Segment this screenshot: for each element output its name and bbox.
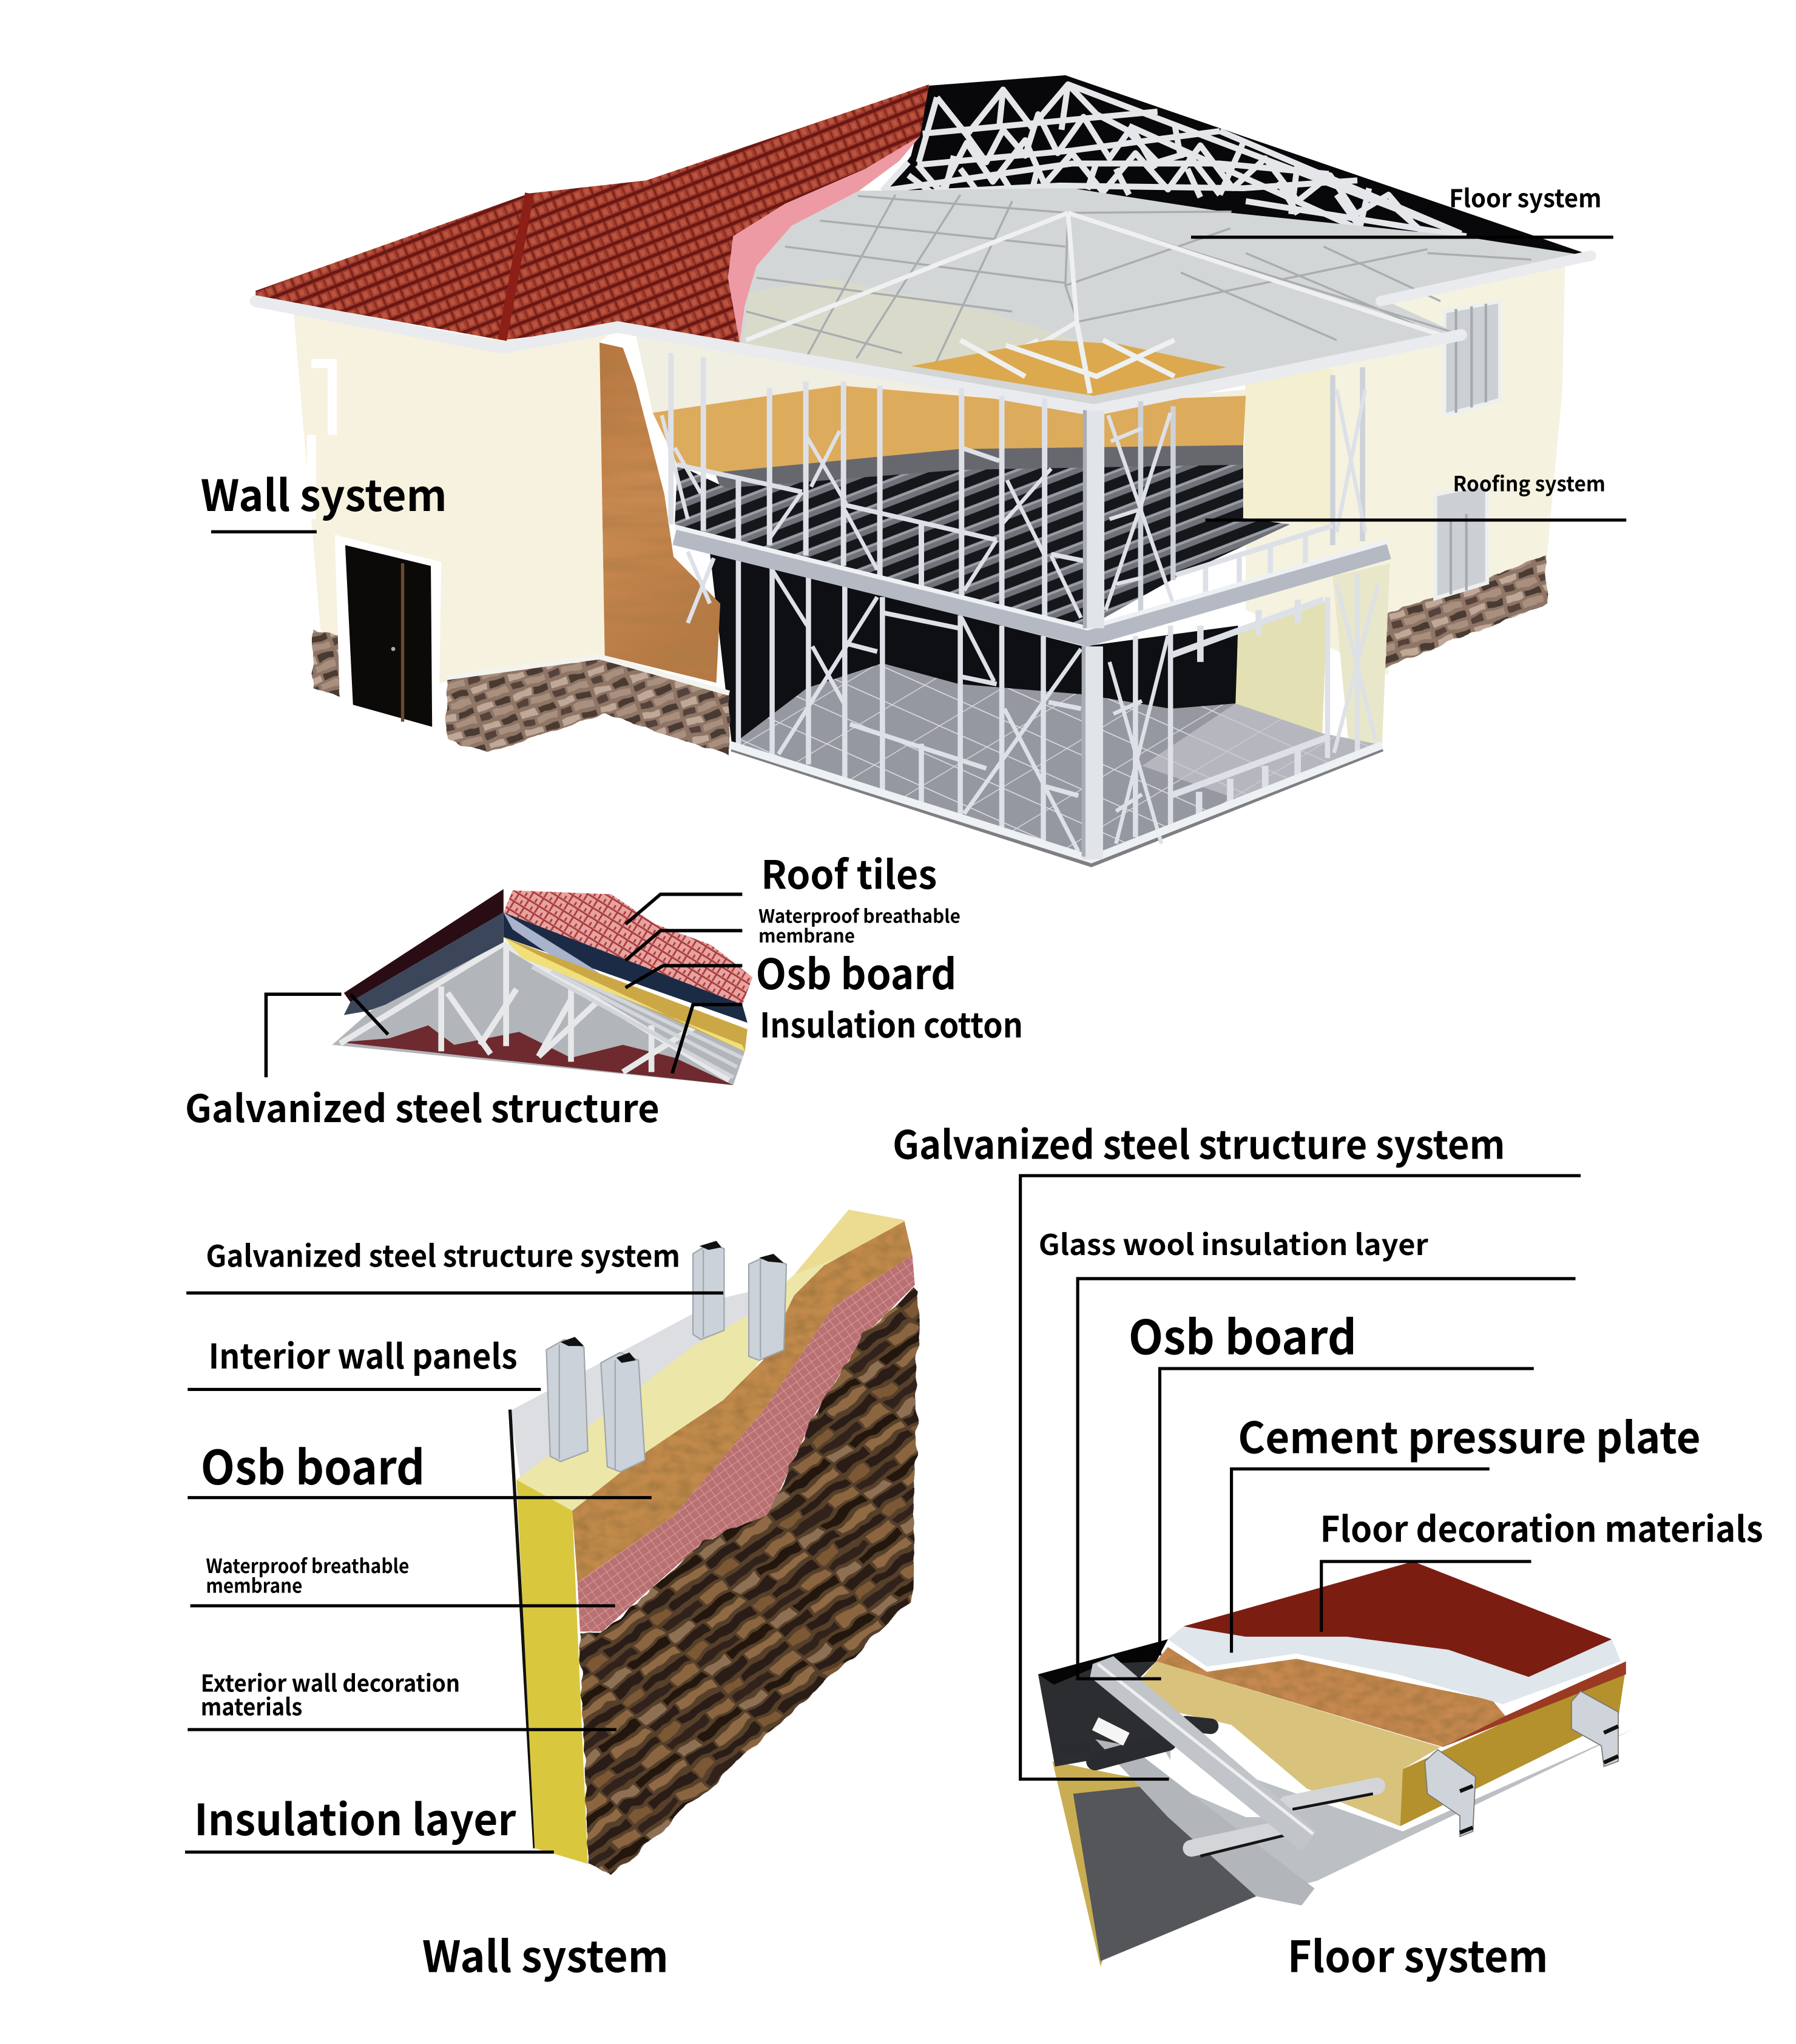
upper right studs: [1141, 367, 1363, 618]
label: osb board: Osb board: [201, 1430, 425, 1498]
upper right braces: [1106, 390, 1365, 610]
upper left studs: [671, 353, 1045, 618]
label: house wall system: Wall system: [201, 462, 447, 524]
leader lines: floor section: [1021, 1176, 1581, 1779]
label: osb board: Osb board: [756, 941, 956, 1001]
label: waterproof breathable membrane: membrane: [206, 1571, 302, 1599]
membrane layer: [578, 1255, 915, 1631]
insulation front: [1400, 1667, 1626, 1826]
exterior stone: [580, 1285, 919, 1875]
left stone base: [447, 659, 729, 756]
label: roof tiles: Roof tiles: [761, 844, 937, 901]
label: waterproof breathable membrane: membrane: [758, 921, 855, 948]
leader lines: wall section: [185, 1293, 723, 1852]
right cream wall: [1246, 266, 1565, 675]
illustration: wall section: [510, 1210, 919, 1875]
dark gray panel: [1073, 1784, 1256, 1961]
cement plate: [1168, 1626, 1621, 1704]
lower storey floor tiles: [732, 663, 1382, 861]
dark roof side: [344, 889, 504, 1002]
eaves: [255, 256, 1591, 410]
label: cement pressure plate: Cement pressure plate: [1238, 1404, 1701, 1466]
dark end: [1038, 1639, 1175, 1767]
illustration: roof section: [333, 889, 752, 1085]
lower right rail: [1170, 600, 1328, 817]
label: floor decoration materials: Floor decoration materials: [1320, 1501, 1763, 1552]
label: galvanized steel structure: Galvanized steel structure: [185, 1078, 660, 1133]
floor finish edge: [1443, 1662, 1626, 1747]
steel studs: [546, 1241, 786, 1472]
clips: [1425, 1691, 1618, 1836]
lower storey dark room: [710, 552, 1238, 779]
right stone base: [1386, 555, 1547, 667]
navy underlay: [344, 912, 504, 1015]
lower left studs: [738, 555, 1044, 845]
lower right studs: [1135, 574, 1357, 837]
label: glass wool insulation layer: Glass wool insulation layer: [1039, 1222, 1428, 1264]
label: galvanized steel structure system: Galvanized steel structure system: [206, 1233, 680, 1276]
label: waterproof breathable membrane: [206, 1551, 409, 1599]
insulation left strip: [1053, 1761, 1170, 1966]
steel rails and bars: [1060, 1656, 1377, 1906]
floor finish: [1184, 1562, 1612, 1677]
label: waterproof breathable membrane: Waterproof breathable: [206, 1551, 409, 1579]
label: waterproof breathable membrane: [758, 902, 960, 948]
illustration: floor section: [1038, 1562, 1634, 1966]
roof tiles: [504, 890, 752, 1004]
insulation: [504, 937, 748, 1051]
lower left rails: [848, 612, 1081, 796]
upper left braces: [662, 415, 1081, 618]
side wall inner panel: [1243, 350, 1332, 526]
label: galvanized steel structure system: Galvanized steel structure system: [893, 1113, 1505, 1170]
opening under roof: [911, 340, 1226, 396]
upper right rail: [1176, 526, 1332, 597]
caption: wall system: Wall system: [422, 1923, 669, 1985]
interior steel truss: [333, 944, 745, 1085]
lower storey side wall: [1235, 601, 1328, 733]
label: insulation cotton: Insulation cotton: [760, 999, 1023, 1048]
osb layer: [572, 1222, 913, 1582]
leader lines: roof section: [266, 895, 742, 1077]
label: exterior wall decoration materials: Exterior wall decoration: [201, 1665, 460, 1699]
wood sheathing: [599, 343, 720, 683]
right windows: [1435, 301, 1500, 598]
roof pink membrane: [728, 137, 920, 343]
label: exterior wall decoration materials: [201, 1665, 460, 1722]
label: exterior wall decoration materials: materials: [201, 1688, 302, 1722]
red tile roof: [255, 84, 929, 343]
illustration: house cutaway: [255, 75, 1592, 863]
osb layer: [1156, 1647, 1505, 1747]
upper storey interior wall: [653, 385, 1246, 472]
left cream wall: [293, 309, 614, 701]
label: osb board: Osb board: [1129, 1300, 1357, 1368]
upper storey joists: [675, 465, 1290, 629]
insulation top: [1141, 1662, 1440, 1826]
upper storey gray band: [715, 445, 1243, 506]
mid floor beam: [675, 536, 1388, 637]
interior wall panel: [510, 1285, 778, 1486]
label: house roofing system: Roofing system: [1453, 467, 1605, 498]
label: house floor system: Floor system: [1449, 178, 1602, 214]
steel frame: [662, 353, 1388, 859]
membrane: [504, 912, 748, 1023]
lower left braces: [688, 552, 1081, 851]
label: interior wall panels: Interior wall panels: [209, 1330, 518, 1379]
upper storey back area: [636, 335, 1246, 413]
label: waterproof breathable membrane: Waterproof breathable: [758, 902, 960, 929]
lower right braces: [1110, 584, 1378, 844]
upper left rails: [677, 448, 1084, 561]
steel roof truss: [859, 75, 1592, 256]
translucent roof panels: [728, 188, 1587, 405]
insulation top: [516, 1210, 905, 1518]
label: insulation layer: Insulation layer: [194, 1786, 516, 1848]
bottom sheet: [1161, 1729, 1634, 1897]
wall notch highlight: [311, 364, 333, 519]
door: [335, 535, 441, 733]
insulation front: [516, 1480, 588, 1864]
white slab: [1170, 1746, 1298, 1817]
caption: floor system: Floor system: [1288, 1923, 1548, 1985]
far right panel: [1332, 563, 1390, 754]
